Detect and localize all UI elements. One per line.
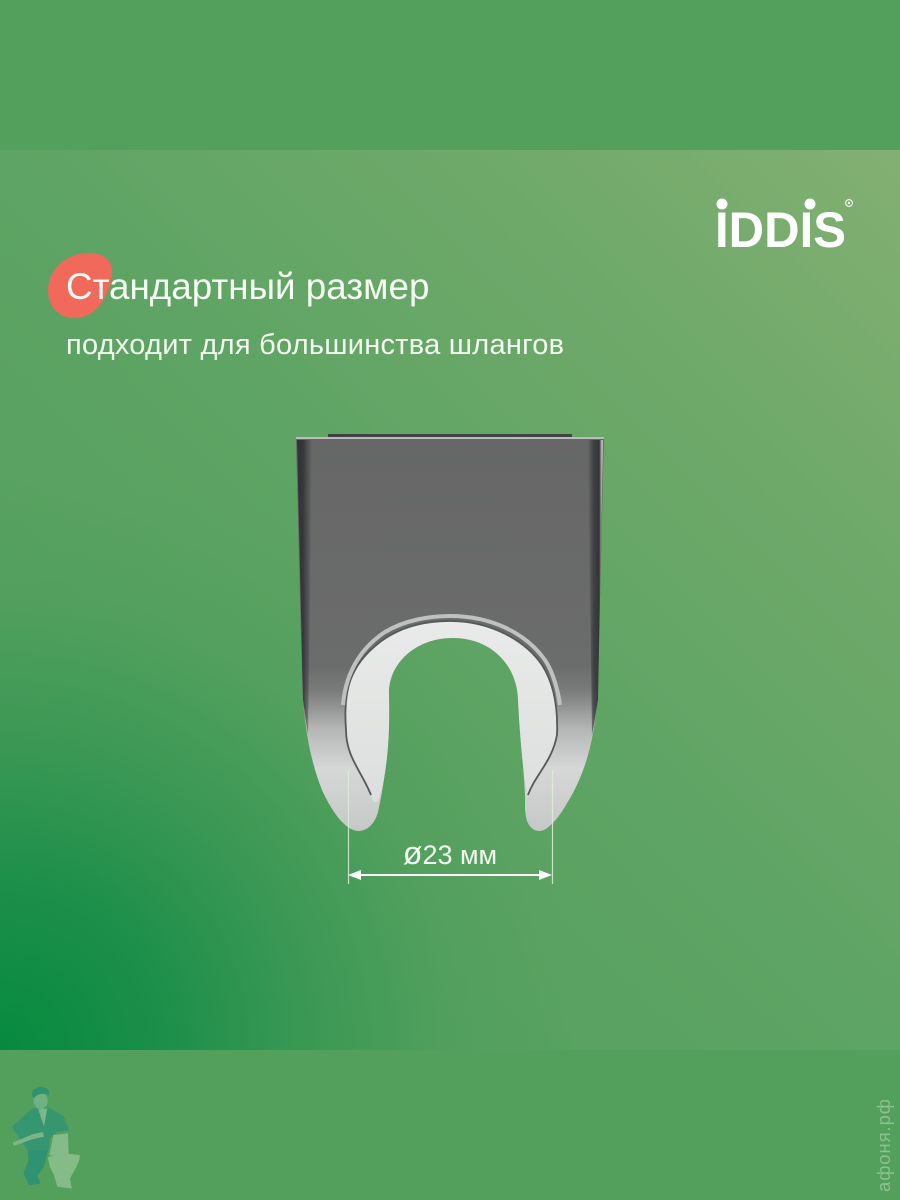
subheading: подходит для большинства шлангов [66,329,564,361]
top highlight [296,437,604,439]
right edge shadow [588,440,603,735]
top edge [328,434,572,438]
body [296,438,604,831]
bowl [48,1154,80,1189]
collar outer highlight [343,616,560,705]
left edge shadow [297,440,312,735]
watermark: афоня.рф [873,1098,894,1192]
dimension: 23 mm: ø23 мм [403,835,497,871]
collar ring [345,621,557,795]
chrome holder [296,434,604,831]
wrench [13,1132,44,1146]
accent blob [48,253,112,318]
panel: gradient background [0,150,900,1050]
chrome collar [345,621,557,802]
jacket [12,1107,69,1150]
legs [23,1147,49,1185]
bottom band [0,1050,900,1200]
hair [32,1087,49,1098]
dimension: 23 mm [348,770,552,884]
icon: plumber mascot [12,1087,80,1189]
tank [49,1133,69,1155]
head [34,1092,48,1109]
top band [0,0,900,150]
shirt [38,1108,47,1127]
heading: Стандартный размер [66,266,429,307]
